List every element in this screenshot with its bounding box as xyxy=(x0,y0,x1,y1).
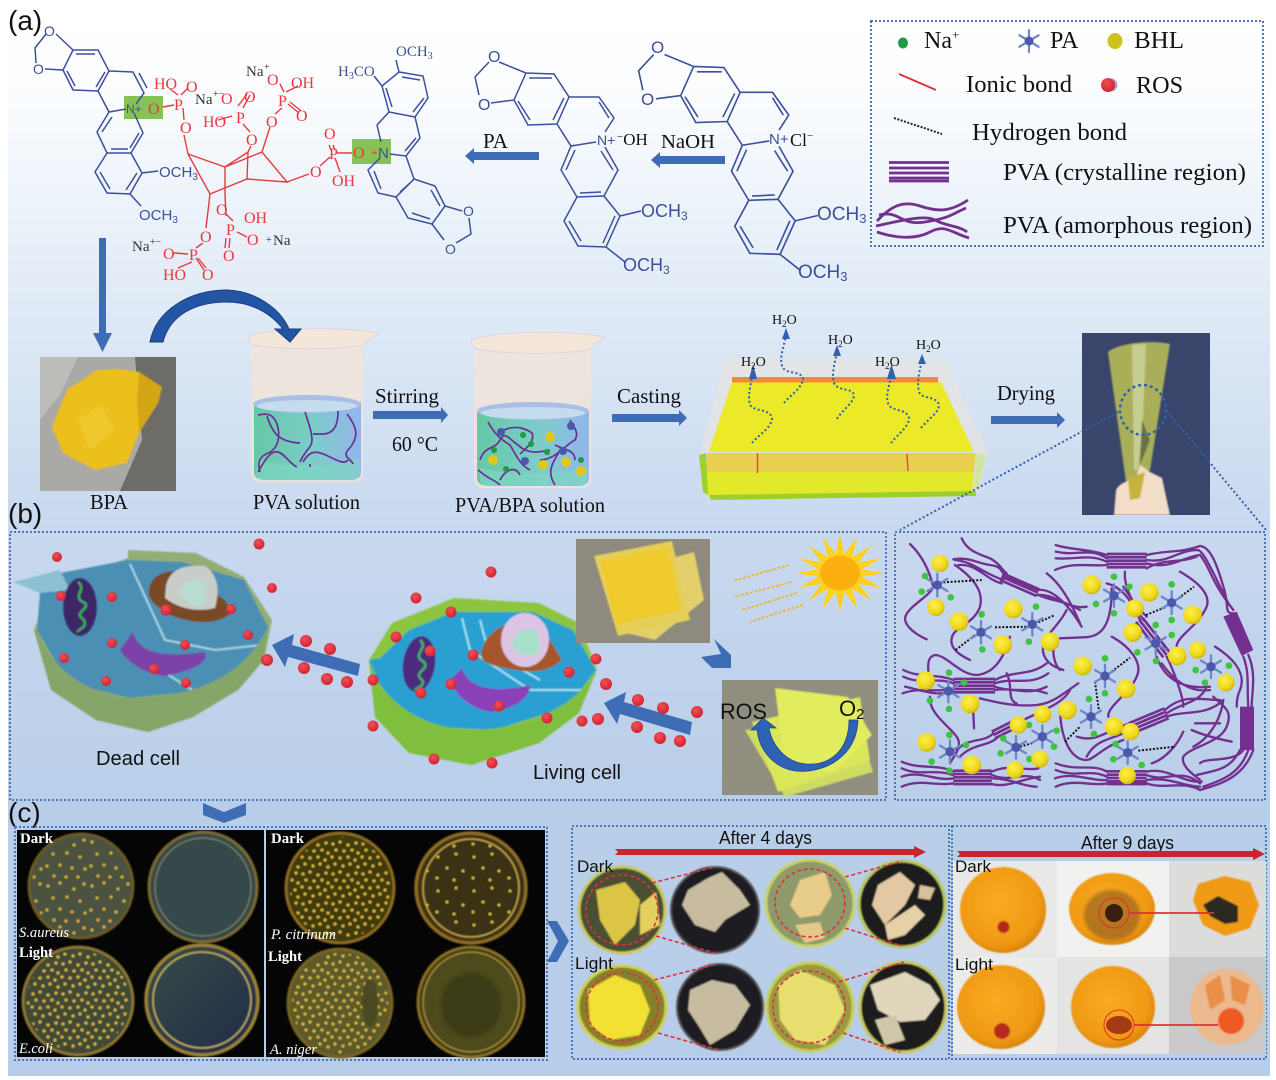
chemical structure: berberine chloride xyxy=(639,38,866,284)
chemical structure: BPA complex: Na xyxy=(195,92,213,108)
chemical structure: berberine chloride: O xyxy=(651,38,664,57)
chemical structure: BPA complex: O xyxy=(44,23,55,39)
icon: ionic bond xyxy=(899,74,936,90)
label: Dark 9 days: Dark xyxy=(955,857,991,876)
icon: chevron xyxy=(701,639,731,668)
chemical structure: BPA complex: O xyxy=(221,91,233,108)
orange: dark peeled xyxy=(1193,876,1259,936)
arrow: stirring xyxy=(373,407,448,423)
chemical structure: berberine chloride: − xyxy=(807,130,813,142)
chemical structure: berberine hydroxide: − xyxy=(617,131,623,143)
chemical structure: BPA complex: P xyxy=(278,93,287,110)
chemical structure: berberine hydroxide: O xyxy=(488,49,500,66)
photo: yellow films xyxy=(576,539,710,643)
chemical structure: BPA complex: O xyxy=(463,203,474,219)
label: After 4 days: After 4 days xyxy=(719,828,812,848)
orange: light peeled xyxy=(1190,969,1264,1045)
icon: Na+ xyxy=(898,38,908,48)
plate labels: E.coli xyxy=(18,1041,53,1057)
label: Living cell: Living cell xyxy=(533,762,621,784)
PA ions xyxy=(927,574,1221,764)
plate: S. aureus dark treated xyxy=(29,834,133,938)
arrow: after 4 days xyxy=(615,846,926,858)
label: water vapour: O xyxy=(756,355,766,370)
chemical structure: berberine chloride: O xyxy=(641,90,654,109)
label: water vapour: 2 xyxy=(751,361,756,371)
label: water vapour: H xyxy=(741,355,751,370)
icon: ROS xyxy=(1101,78,1118,92)
icon: hydrogen bond xyxy=(894,118,942,134)
label: water vapour: H xyxy=(875,355,885,370)
chemical structure: berberine chloride: OCH xyxy=(817,204,859,225)
arrow: toward dead cell xyxy=(272,634,360,676)
chemical structure: BPA complex: O xyxy=(216,202,228,219)
label: PA legend: PA xyxy=(1050,28,1079,54)
chemical structure: BPA complex: + xyxy=(264,62,270,73)
plate: E. coli light treated xyxy=(23,947,133,1055)
label: Dark 4 days: Dark xyxy=(577,857,613,876)
label: water vapour: O xyxy=(890,355,900,370)
label: After 9 days: After 9 days xyxy=(1081,833,1174,853)
chemical structure: BPA complex: P xyxy=(236,110,245,127)
chemical structure: BPA complex: O xyxy=(324,126,336,143)
chemical structure: BPA complex: P xyxy=(189,247,198,264)
label: water vapour: O xyxy=(843,333,853,348)
chemical structure: BPA complex: O xyxy=(148,101,160,118)
sample plates light xyxy=(578,962,946,1052)
label: Stirring: Stirring xyxy=(375,384,439,408)
chemical structure: BPA complex: CO xyxy=(354,64,375,80)
chemical structure: BPA complex: HO xyxy=(154,76,177,93)
chemical structure: BPA complex: O xyxy=(33,61,44,77)
label: water vapour: O xyxy=(931,338,941,353)
icon: amorphous region xyxy=(876,200,969,238)
chemical structure: BPA complex: N+ xyxy=(126,102,142,116)
panel: cell antibacterial mechanism xyxy=(10,532,886,800)
label: Casting: Casting xyxy=(617,384,681,408)
chemical structure: berberine chloride: OCH xyxy=(798,262,840,283)
chemical structure: BPA complex: OCH xyxy=(159,164,192,181)
PVA strands xyxy=(902,538,1253,790)
plate labels: P. citrinum xyxy=(270,927,336,943)
orange: dark control xyxy=(960,867,1046,953)
label: water vapour: 2 xyxy=(782,319,787,329)
label: PA: PA xyxy=(483,129,509,153)
illustration: casting dish xyxy=(699,328,988,500)
label: ROS: ROS xyxy=(1136,73,1183,99)
icon: crystalline region xyxy=(889,162,949,181)
arrow: down to BPA xyxy=(93,238,112,352)
photo: film generating ROS xyxy=(720,680,878,797)
arrows: sunlight xyxy=(733,565,803,622)
label: hydrogen bond: Hydrogen bond xyxy=(972,120,1127,146)
label: crystalline: PVA (crystalline region) xyxy=(1003,160,1246,186)
beaker: PVA solution xyxy=(248,329,379,482)
label: Light 4 days: Light xyxy=(575,954,613,973)
label: Dead cell: Dead cell xyxy=(96,748,180,770)
chemical structure: BPA complex: O xyxy=(353,145,365,162)
label: water vapour xyxy=(741,313,941,371)
chemical structure: BPA complex: Na xyxy=(132,239,150,255)
panel: food preservation after 4 days xyxy=(572,826,949,1059)
chemical structure: BPA complex: H xyxy=(338,64,349,80)
chemical structure: BPA complex: Na xyxy=(273,233,291,249)
panel (b) label: (b) xyxy=(8,498,42,529)
label: ROS: ROS xyxy=(720,699,767,724)
zoom lines from film to network xyxy=(900,410,1266,530)
chemical structure: berberine hydroxide: 3 xyxy=(681,209,688,223)
label: water vapour: 2 xyxy=(838,339,843,349)
photo tiles xyxy=(953,861,1266,1054)
panel: PVA/BPA network xyxy=(895,532,1265,800)
sample plates dark xyxy=(579,860,945,953)
illustration: living cell xyxy=(369,598,597,765)
chemical structure: BPA complex xyxy=(33,23,474,284)
chemical structure: berberine chloride: N+ xyxy=(769,131,789,148)
label: water vapour: 2 xyxy=(926,344,931,354)
chemical structure: BPA complex: O xyxy=(445,241,456,257)
chemical structure: BPA complex: HO xyxy=(203,114,226,131)
chemical structure: BPA complex: O xyxy=(200,229,212,246)
chemical structure: BPA complex: O xyxy=(180,120,192,137)
arrow: casting xyxy=(612,410,687,426)
arrow: toward living cell xyxy=(604,692,692,735)
chemical structure: berberine chloride: 3 xyxy=(840,269,847,284)
plate labels: Dark xyxy=(271,831,305,847)
panel (a) label: (a) xyxy=(8,5,42,36)
chemical structure: BPA complex: OH xyxy=(244,210,268,227)
chemical structure: BPA complex: O xyxy=(310,164,322,181)
label: amorphous: PVA (amorphous region) xyxy=(1003,213,1252,239)
chemical structure: berberine hydroxide xyxy=(475,49,688,277)
chemical structure: berberine hydroxide: 3 xyxy=(663,263,670,277)
hydrogen bonds xyxy=(943,580,1194,751)
chemical structure: berberine hydroxide: OCH xyxy=(641,201,681,221)
chemical structure: berberine hydroxide: O xyxy=(478,97,490,114)
plate labels: Light xyxy=(19,945,53,961)
ROS particles xyxy=(52,538,703,768)
plate: P. citrinum dark treated xyxy=(286,833,394,943)
chemical structure: BPA complex: 3 xyxy=(192,172,198,183)
label: water vapour: H xyxy=(828,333,838,348)
orange: light infected xyxy=(1071,966,1155,1048)
chemical structure: BPA complex: HO xyxy=(163,267,186,284)
panel (c) label: (c) xyxy=(8,797,41,828)
photo: BPA powder xyxy=(40,357,176,491)
label: water vapour: H xyxy=(916,338,926,353)
beaker: PVA/BPA solution xyxy=(471,332,605,488)
label: O2: 2 xyxy=(856,706,864,723)
arrow: curved to beaker xyxy=(150,290,301,342)
panel: legend xyxy=(871,21,1263,246)
plate labels: Dark xyxy=(20,831,54,847)
label: PVA/BPA solution: PVA/BPA solution xyxy=(455,493,605,517)
chemical structure: BPA complex: Na xyxy=(246,64,264,80)
chemical structure: BPA complex: + xyxy=(266,235,272,246)
chemical structure: BPA complex: O xyxy=(202,267,214,284)
label: BPA: BPA xyxy=(90,490,129,514)
chemical structure: BPA complex: P xyxy=(174,97,183,114)
label: NaOH: NaOH xyxy=(661,131,715,153)
label: water vapour: O xyxy=(787,313,797,328)
illustration: dead cell xyxy=(14,550,272,732)
arrow: NaOH xyxy=(651,152,725,168)
chemical structure: berberine hydroxide: OH xyxy=(623,130,648,149)
chevron down xyxy=(203,803,246,823)
connector lines xyxy=(1130,913,1218,1025)
chemical structure: BPA complex: OCH xyxy=(139,207,172,224)
plate: S. aureus dark film xyxy=(149,832,257,942)
chemical structure: BPA complex: OH xyxy=(291,75,315,92)
Na+ ions xyxy=(918,573,1232,774)
label: Na+: + xyxy=(952,27,959,42)
label: Drying: Drying xyxy=(997,381,1055,405)
chemical structure: BPA complex: OCH xyxy=(396,44,428,60)
icon: sun xyxy=(795,534,885,612)
plate: P. citrinum dark film xyxy=(416,833,526,943)
label: water vapour: 2 xyxy=(885,361,890,371)
chemical structure: BPA complex: O xyxy=(247,232,259,249)
plate labels: A. niger xyxy=(269,1042,317,1058)
chemical structure: BPA complex: P xyxy=(226,222,235,239)
panel: orange preservation after 9 days xyxy=(952,826,1266,1059)
chevron right xyxy=(547,921,569,962)
panel: antimicrobial plates xyxy=(15,827,547,1060)
chemical structure: BPA complex: O xyxy=(296,108,308,125)
plate labels xyxy=(18,831,336,1058)
chemical structure: BPA complex: O xyxy=(266,114,278,131)
photo: rolled film xyxy=(1082,333,1210,515)
chemical structure: BPA complex: O xyxy=(244,89,256,106)
chemical structure: berberine chloride: 3 xyxy=(859,211,866,226)
orange: dark infected xyxy=(1069,873,1155,945)
icon: BHL xyxy=(1108,33,1122,49)
chemical structure: BPA complex: O xyxy=(267,72,279,89)
chemical structure: BPA complex: O xyxy=(163,246,175,263)
chemical structure: berberine hydroxide: N+ xyxy=(597,132,615,148)
arrow: PA xyxy=(465,148,539,164)
plate: E. coli light film xyxy=(146,945,258,1055)
label: Light 9 days: Light xyxy=(955,955,993,974)
icon: PA xyxy=(1019,30,1039,52)
chemical structure: berberine chloride: Cl xyxy=(790,130,807,150)
plate labels: S.aureus xyxy=(19,925,69,941)
label: ionic bond: Ionic bond xyxy=(966,72,1072,98)
dashed selection circles and lines xyxy=(586,861,904,1052)
orange: light control xyxy=(957,965,1045,1049)
chemical structure: BPA complex: O xyxy=(223,248,235,265)
plate labels: Light xyxy=(268,949,302,965)
chemical structure: BPA complex: N xyxy=(378,145,389,162)
label: temperature: 60 °C xyxy=(392,432,438,456)
chemical structure: BPA complex: O xyxy=(246,132,258,149)
chemical structure: berberine hydroxide: OCH xyxy=(623,255,663,275)
chemical structure: BPA complex: 3 xyxy=(172,215,178,226)
label: O2: O xyxy=(839,696,856,721)
arrow: after 9 days xyxy=(957,848,1265,860)
crystalline regions xyxy=(953,554,1170,784)
arrow: drying xyxy=(991,412,1065,428)
label: PVA solution: PVA solution xyxy=(253,490,360,514)
chemical structure: BPA complex: +− xyxy=(213,89,225,100)
chemical structure: BPA complex: OH xyxy=(332,173,356,190)
label: water vapour: H xyxy=(772,313,782,328)
label: BHL: BHL xyxy=(1134,28,1184,54)
chemical structure: BPA complex: 3 xyxy=(428,51,433,62)
chemical structure: BPA complex: P xyxy=(329,146,338,163)
BHL spheres xyxy=(916,555,1235,784)
plate: A. niger light film xyxy=(418,947,524,1057)
chemical structure: BPA complex: O xyxy=(186,79,198,96)
chemical structure: BPA complex: + xyxy=(371,147,377,159)
chemical structure: BPA complex: 3 xyxy=(349,71,354,82)
plate: A. niger light treated xyxy=(288,949,392,1057)
label: Na+: Na xyxy=(924,28,952,54)
chemical structure: BPA complex: +− xyxy=(150,237,162,248)
